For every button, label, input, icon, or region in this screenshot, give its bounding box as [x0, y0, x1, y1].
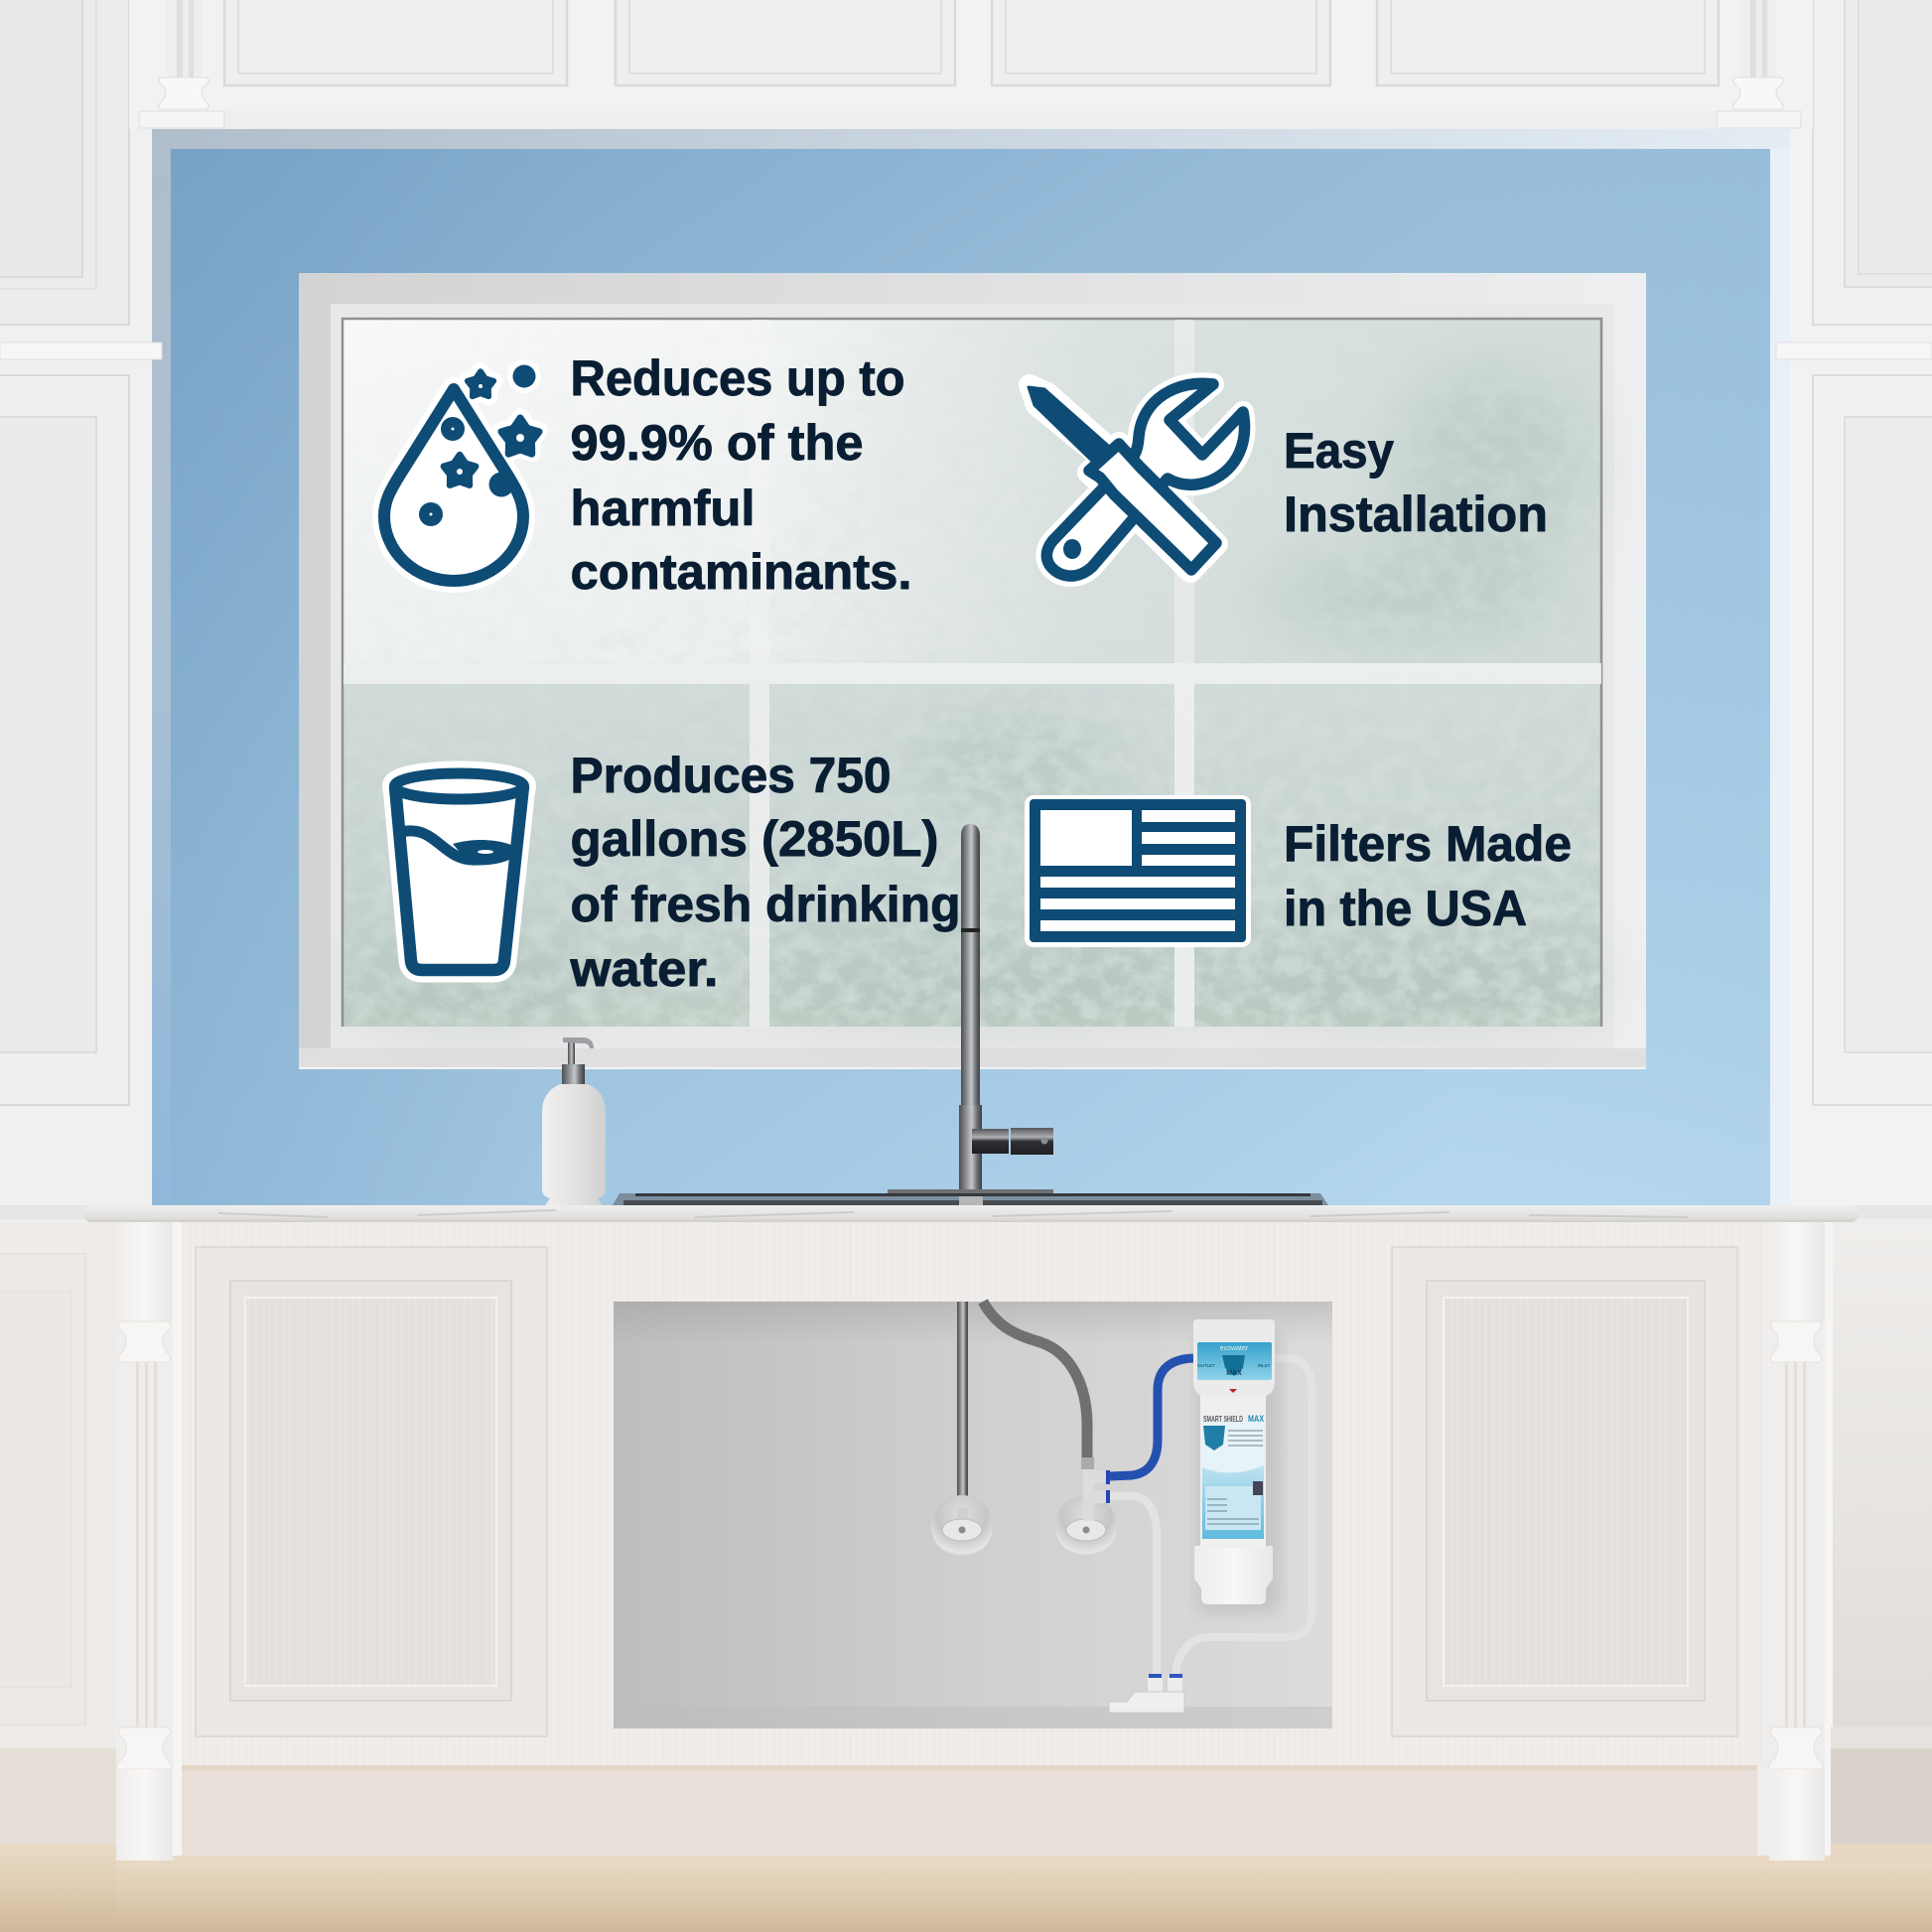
right wall valve: [1055, 1495, 1117, 1557]
tools halo: [1030, 383, 1245, 576]
right outer cabinet panel: [1831, 1726, 1932, 1844]
soap dispenser: [542, 1037, 606, 1207]
panel: top cabinet door 1: [224, 0, 567, 85]
marble countertop: [0, 1205, 1932, 1222]
left wall panels: [0, 0, 162, 1206]
filter cartridge body: [1200, 1395, 1266, 1548]
drop outline: [384, 389, 523, 581]
faucet: [888, 824, 1053, 1200]
under-sink niche: [614, 1302, 1332, 1728]
text: produces 750 gallons: of fresh drinking: [570, 876, 961, 932]
icon: american flag: [1025, 795, 1251, 947]
sink: [613, 1193, 1328, 1205]
text: produces 750 gallons: gallons (2850L): [570, 810, 939, 867]
panel: top cabinet door 4: [1377, 0, 1719, 85]
left pedestal column: [116, 1222, 173, 1861]
blue wall panel: [152, 129, 1790, 1211]
floor: [0, 1844, 1932, 1932]
wrench hole: [1063, 539, 1081, 559]
panel: top cabinet door 3: [992, 0, 1330, 85]
wrench: [1046, 383, 1245, 576]
filter head: INLET: [1258, 1363, 1271, 1368]
text: reduces contaminants: 99.9% of the: [570, 414, 864, 471]
plumbing: supply hoses and valves: [931, 1302, 1312, 1674]
text: filters made in the usa: [1284, 815, 1572, 936]
screwdriver handle: [1089, 444, 1216, 570]
text: reduces contaminants: [570, 349, 911, 600]
text: reduces contaminants: contaminants.: [570, 543, 911, 600]
glass rim: [395, 773, 524, 799]
glass edge shadow lines: [343, 319, 1601, 1027]
filter head: OUTLET: [1197, 1363, 1215, 1368]
white tube from filter to connector: [1175, 1358, 1312, 1674]
text: produces 750 gallons: water.: [569, 940, 719, 997]
filter head: [1193, 1319, 1275, 1397]
cartridge label: SMART SHIELD: [1203, 1414, 1243, 1424]
filter shadow: [1197, 1330, 1281, 1613]
right cornice ledge: [1717, 111, 1801, 128]
text: reduces contaminants: Reduces up to: [570, 349, 905, 406]
text: easy installation: Easy: [1284, 422, 1394, 479]
text: produces 750 gallons: [569, 747, 961, 997]
left outer cabinet panel: [0, 1254, 116, 1844]
screwdriver shaft: [1029, 387, 1114, 467]
window frame: [299, 273, 1646, 1069]
text: produces 750 gallons: Produces 750: [570, 747, 892, 803]
window glass with foggy trees: [343, 319, 1608, 1027]
panel: left cabinet door: [196, 1247, 547, 1736]
faucet handle: [972, 1128, 1053, 1155]
contaminant particles: [419, 365, 539, 526]
cartridge label: MAX: [1248, 1414, 1264, 1425]
text: filters made in the usa: Filters Made: [1284, 815, 1572, 872]
left cornice ledge: [139, 111, 224, 128]
drop halo: [384, 359, 541, 581]
text: reduces contaminants: harmful: [570, 480, 755, 536]
icon: water drop with contaminants: [384, 359, 541, 581]
glass body: [395, 786, 523, 970]
window muntins: [344, 320, 1601, 1027]
filter head: MAX: [1226, 1370, 1242, 1377]
top left column: [159, 0, 208, 109]
lower cabinet body: [0, 1222, 1932, 1861]
panel: right cabinet door: [1392, 1247, 1737, 1736]
panel: top cabinet door 2: [616, 0, 955, 85]
icon: crossed screwdriver and wrench: [1029, 383, 1245, 576]
left wall valve: [931, 1495, 993, 1557]
text: easy installation: Installation: [1284, 485, 1548, 542]
icon: glass of water: [395, 773, 524, 970]
white tube from valve to connector: [1110, 1496, 1157, 1674]
filter head: ecowater: [1220, 1345, 1249, 1352]
right hose: [983, 1302, 1087, 1459]
faucet spout: [961, 824, 980, 1108]
cartridge label: [1202, 1414, 1264, 1539]
blue inlet tube: [1110, 1358, 1193, 1476]
right wall panels: [1776, 0, 1932, 1206]
drain connector fitting: [1109, 1674, 1184, 1713]
filter base cap: [1194, 1546, 1273, 1604]
glass halo: [395, 773, 524, 970]
text: filters made in the usa: in the USA: [1284, 880, 1527, 936]
upper white wall background: [0, 0, 1932, 1216]
left hose: [957, 1302, 968, 1512]
upper cabinetry: [129, 0, 1813, 129]
right pedestal column: [1769, 1222, 1825, 1861]
text: easy installation: [1284, 422, 1548, 542]
t-fitting: [1081, 1457, 1110, 1521]
top right column: [1733, 0, 1783, 109]
water filter unit: [1193, 1319, 1281, 1613]
water surface wave: [401, 831, 516, 864]
